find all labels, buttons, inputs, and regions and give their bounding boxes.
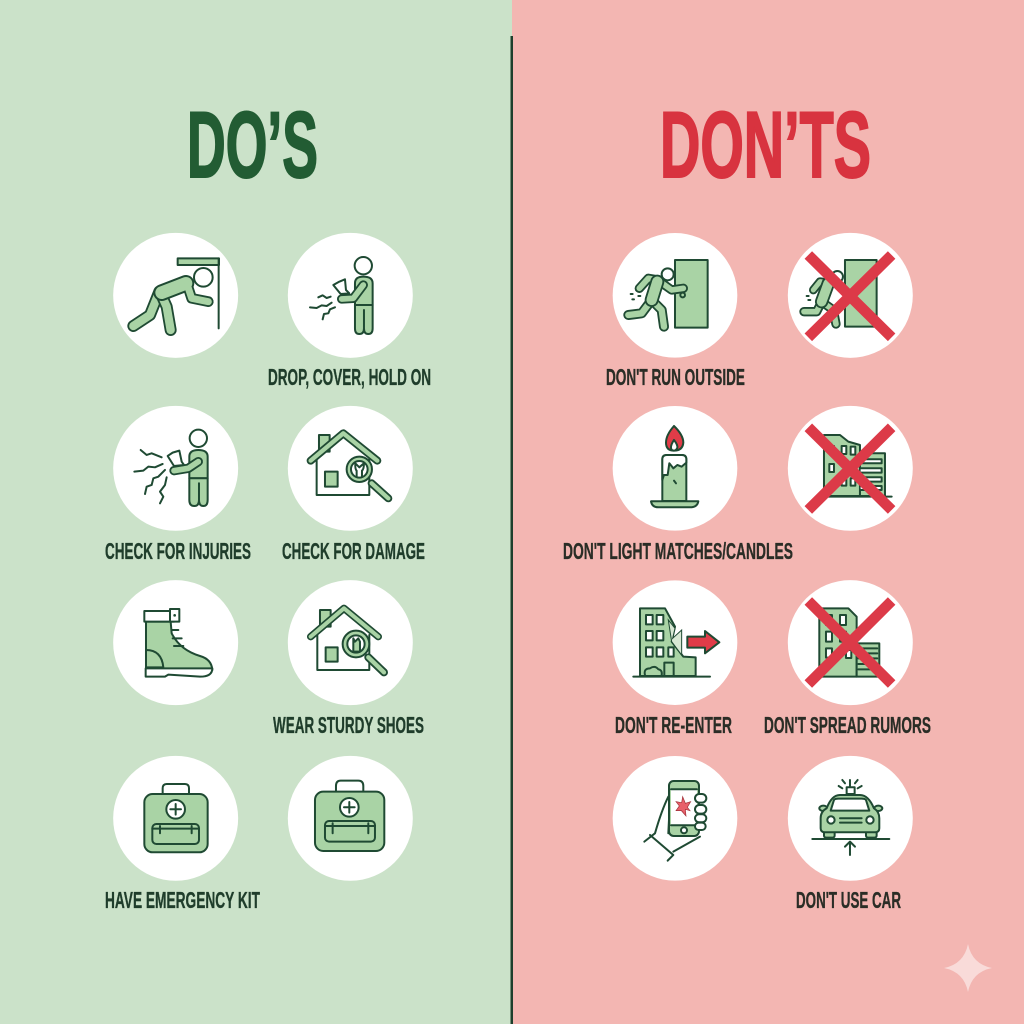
icon: house damage inspection <box>288 406 413 531</box>
label: don't re-enter: DON'T RE-ENTER <box>615 712 732 738</box>
label: drop, cover, hold on: DROP, COVER, HOLD ON <box>268 364 431 390</box>
icon: crossed-out damaged building <box>788 406 913 531</box>
icon: candle <box>613 406 737 531</box>
icon: boot <box>113 580 238 705</box>
panel: do's <box>0 0 512 1024</box>
label: have emergency kit: HAVE EMERGENCY KIT <box>105 887 260 913</box>
icon: car with siren <box>788 756 913 881</box>
icon: crossed-out running person <box>788 233 913 358</box>
icon: checking for injuries <box>113 406 238 531</box>
icon: person running through door <box>613 233 737 358</box>
icon: hand holding phone <box>613 756 737 881</box>
icon: crossed-out office building <box>788 580 913 705</box>
panel: don'ts <box>512 0 1024 1024</box>
icon: house with magnifier <box>288 580 413 705</box>
icon: emergency kit duplicate <box>288 756 413 881</box>
label: don't light matches/candles: DON'T LIGHT MATCHES/CANDLES <box>563 538 793 564</box>
label: check for damage: CHECK FOR DAMAGE <box>282 538 425 564</box>
icon: person with raised hands <box>288 233 413 358</box>
label: don't use car: DON'T USE CAR <box>796 887 901 913</box>
icon: drop under doorway <box>113 233 238 358</box>
title: do's: DO’S <box>187 92 318 197</box>
label: don't run outside: DON'T RUN OUTSIDE <box>606 364 745 390</box>
icon: damaged building with exit arrow <box>613 580 737 705</box>
icon: sparkle <box>944 944 992 992</box>
title: don'ts: DON’TS <box>660 92 871 197</box>
label: wear sturdy shoes: WEAR STURDY SHOES <box>273 712 424 738</box>
center divider <box>510 36 513 1024</box>
label: check for injuries: CHECK FOR INJURIES <box>105 538 251 564</box>
icon: emergency kit <box>113 756 238 881</box>
